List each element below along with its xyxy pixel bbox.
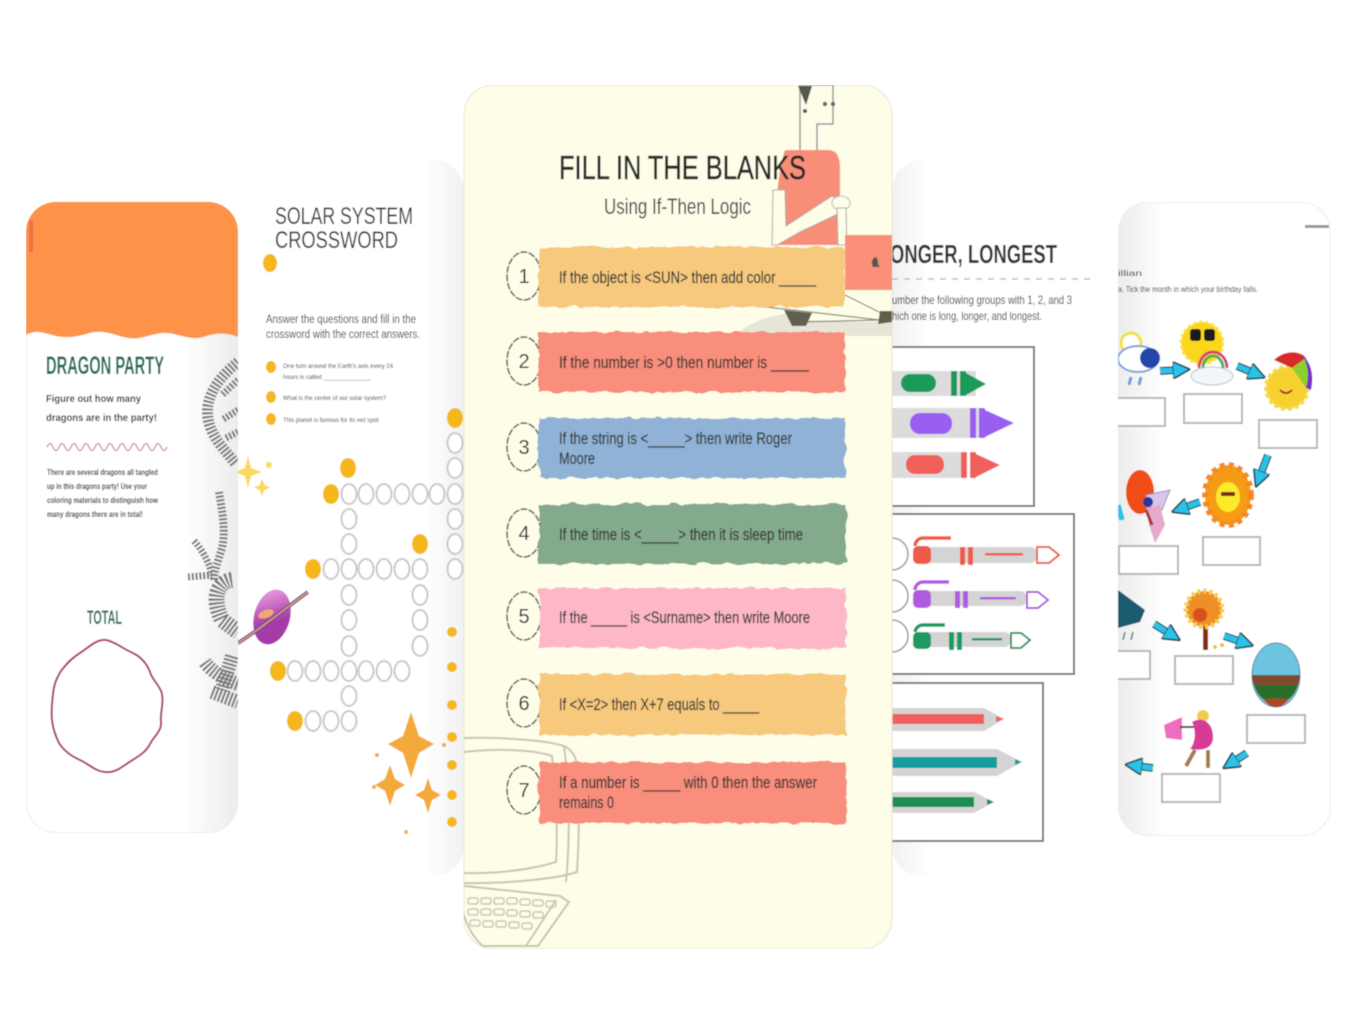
heading: longer longest: ONGER, LONGEST bbox=[890, 239, 1057, 269]
row 3: Moore bbox=[559, 449, 595, 468]
body text: many dragons there are in total! bbox=[47, 510, 143, 519]
red tick on header bbox=[29, 220, 33, 252]
row 3: 3 bbox=[518, 437, 530, 459]
row 2: If the number is >0 then number is _____ bbox=[559, 353, 809, 372]
intro text: Figure out how many bbox=[46, 393, 141, 405]
heading: solar system crossword: SOLAR SYSTEM bbox=[275, 203, 413, 230]
crossword grid bbox=[270, 408, 463, 827]
heading dot bbox=[263, 254, 277, 272]
icon: sun with rainbow bbox=[1181, 322, 1233, 385]
row 3 bbox=[507, 418, 845, 478]
panel: birthday month card bbox=[1105, 202, 1331, 836]
instructions bbox=[1118, 268, 1258, 294]
icon: storm cloud bbox=[1118, 333, 1160, 385]
row 4: If the time is <_____> then it is sleep time bbox=[559, 525, 803, 544]
row 7 bbox=[507, 762, 846, 823]
instructions bbox=[892, 293, 1072, 323]
dashed rule bbox=[892, 278, 1092, 280]
row 6: If <X=2> then X+7 equals to _____ bbox=[559, 695, 759, 714]
row 5 bbox=[507, 588, 846, 648]
row 7: If a number is _____ with 0 then the answer bbox=[559, 773, 817, 792]
icon: umbrella sun bbox=[1266, 352, 1312, 409]
panel: fill in the blanks card bbox=[464, 85, 892, 949]
row 4: 4 bbox=[518, 523, 530, 545]
body text: coloring materials to distinguish how bbox=[47, 496, 159, 505]
heading: solar system crossword: CROSSWORD bbox=[275, 227, 398, 254]
instructions: Answer the questions and fill in the bbox=[266, 314, 416, 326]
panel: dragon party card bbox=[26, 202, 238, 833]
row 7: remains 0 bbox=[559, 793, 614, 812]
intro text: dragons are in the party! bbox=[46, 412, 157, 424]
row 4 bbox=[507, 504, 846, 564]
icon: orange stars bbox=[372, 712, 446, 834]
wavy divider bbox=[47, 444, 167, 450]
icon: dark rain cloud bbox=[1118, 590, 1145, 640]
body text: up in this dragons party! Use your bbox=[47, 482, 147, 491]
intro text bbox=[46, 393, 157, 424]
total label: TOTAL bbox=[87, 608, 122, 629]
clue list bbox=[266, 361, 394, 425]
icon: yellow sparkles bbox=[234, 456, 272, 496]
heading: solar system crossword bbox=[275, 206, 412, 249]
icon: ringed planet bbox=[238, 585, 308, 649]
dragon line sketches bbox=[188, 362, 238, 702]
row 6 bbox=[507, 674, 846, 735]
row 5: 5 bbox=[518, 606, 530, 628]
icon: autumn tree bbox=[1186, 591, 1224, 650]
heading: fill in the blanks: FILL IN THE BLANKS bbox=[559, 149, 806, 186]
row 2 bbox=[507, 332, 845, 392]
row 6: 6 bbox=[518, 693, 530, 715]
arrows bbox=[1118, 366, 1268, 768]
clue list: hours is called ______________ bbox=[283, 375, 372, 381]
instructions: illian bbox=[1118, 268, 1142, 278]
orange wavy header bbox=[26, 202, 238, 338]
clue list: What is the center of our solar system? bbox=[283, 396, 387, 402]
instructions: crossword with the correct answers. bbox=[266, 329, 420, 341]
heading: dragon party: DRAGON PARTY bbox=[46, 352, 164, 380]
row 7: 7 bbox=[518, 780, 530, 802]
box: crayons bbox=[892, 347, 1034, 506]
row 2: 2 bbox=[518, 351, 530, 373]
row 3: If the string is <_____> then write Roger bbox=[559, 429, 792, 448]
answer boxes bbox=[1105, 394, 1317, 802]
icon: balloon and figure bbox=[1126, 470, 1170, 543]
row 1 bbox=[507, 247, 845, 307]
wavy total frame bbox=[52, 640, 163, 772]
instructions: a. Tick the month in which your birthday falls. bbox=[1118, 284, 1258, 294]
icon: girl with umbrella bbox=[1164, 710, 1213, 768]
instructions bbox=[266, 314, 420, 341]
row 5: If the _____ is <Surname> then write Moore bbox=[559, 608, 810, 627]
box: pens bbox=[892, 514, 1074, 674]
instructions: umber the following groups with 1, 2, and 3 bbox=[892, 293, 1072, 307]
body text bbox=[47, 468, 159, 519]
illustration: person with laptop bbox=[735, 85, 892, 336]
clue list: One turn around the Earth's axis every 24 bbox=[283, 364, 394, 370]
row 1: If the object is <SUN> then add color _____ bbox=[559, 268, 816, 287]
panel: longer longest card bbox=[890, 160, 1118, 876]
body text: There are several dragons all tangled bbox=[47, 468, 158, 477]
subheading: Using If-Then Logic bbox=[604, 194, 751, 219]
icon: big sun bbox=[1205, 465, 1251, 525]
small header line bbox=[1305, 225, 1329, 228]
icon: globe scene bbox=[1252, 643, 1300, 707]
instructions: hich one is long, longer, and longest. bbox=[892, 309, 1042, 323]
panel: solar system crossword card bbox=[234, 160, 464, 876]
row 1: 1 bbox=[518, 266, 530, 288]
box: pencils bbox=[892, 683, 1043, 841]
illustration: retro computer bbox=[464, 738, 579, 946]
clue list: This planet is famous for its red spot. bbox=[283, 418, 380, 424]
